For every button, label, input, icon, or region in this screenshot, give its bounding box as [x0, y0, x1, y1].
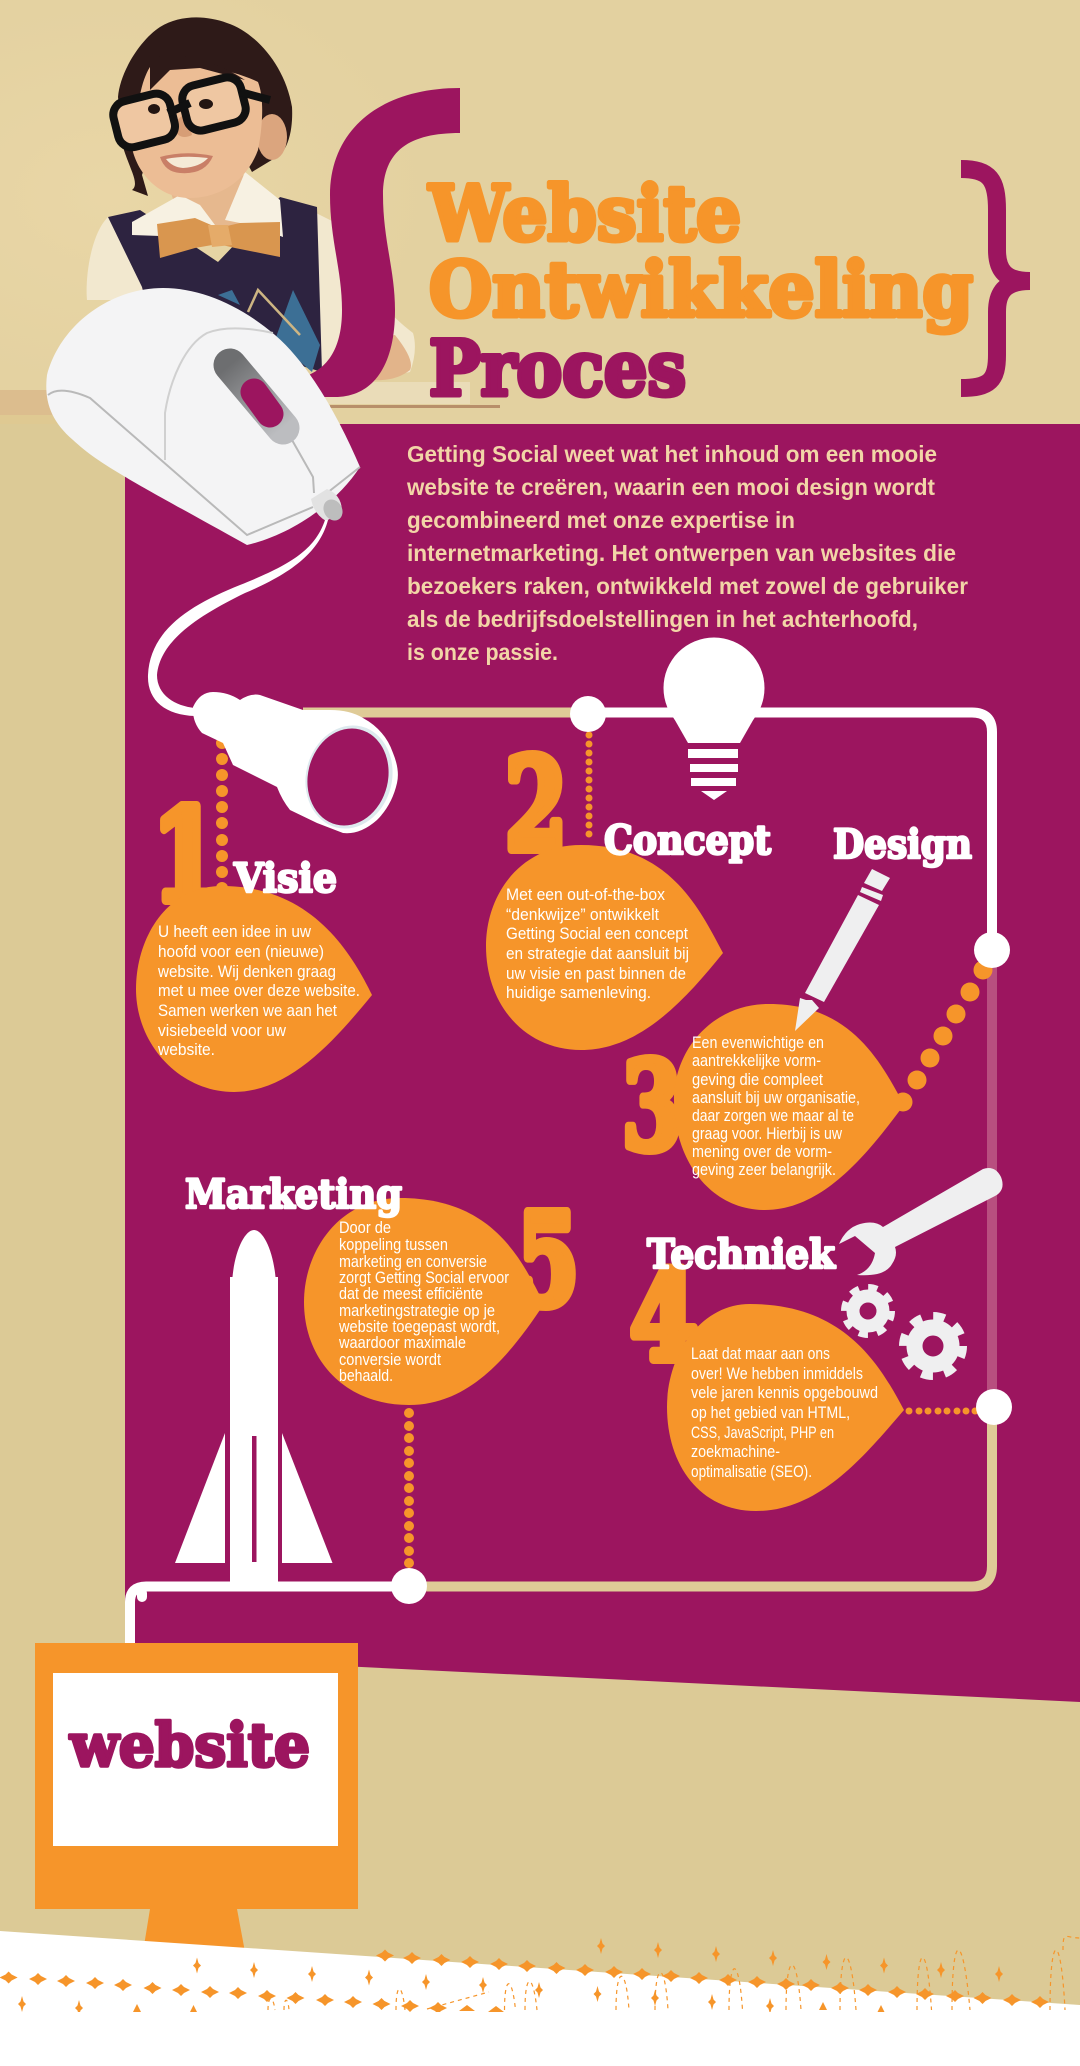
bubble 5: marketing: conversie wordt	[339, 1351, 441, 1369]
icon: wrench	[839, 1168, 1003, 1275]
bubble 1: visie	[136, 886, 372, 1092]
title: Ontwikkeling	[429, 245, 973, 334]
heading: concept: Concept	[604, 817, 771, 864]
intro text: gecombineerd met onze expertise in	[407, 507, 795, 533]
bubble 3: design: aantrekkelijke vorm-	[692, 1052, 821, 1070]
icon: light bulb	[664, 638, 764, 800]
bubble 5: marketing: website toegepast wordt,	[338, 1318, 500, 1336]
pipeline nodes	[391, 696, 1012, 1604]
bubble 1: visie: met u mee over deze website.	[158, 982, 360, 1000]
heading: techniek: Techniek	[647, 1231, 836, 1278]
heading: visie: Visie	[233, 855, 337, 902]
photo: child with glasses and bow tie	[87, 17, 415, 380]
bubble 1: visie: hoofd voor een (nieuwe)	[158, 943, 324, 961]
monitor	[35, 1643, 358, 1952]
bubble 1: visie: website. Wij denken graag	[157, 963, 336, 981]
numeral 3: 3	[622, 1034, 682, 1178]
bubble 5: marketing: koppeling tussen	[339, 1236, 448, 1254]
footer diamonds pattern	[0, 1936, 1080, 2016]
bubble 2: concept: “denkwijze” ontwikkelt	[506, 906, 659, 924]
book on table	[320, 382, 500, 408]
icon: small gear	[844, 1287, 892, 1335]
bubble 4: techniek: vele jaren kennis opgebouwd	[691, 1384, 878, 1402]
icon: mouse	[46, 288, 360, 545]
bubble 2: concept	[486, 845, 723, 1050]
title: Proces	[429, 324, 686, 413]
bubble 1: visie: U heeft een idee in uw	[158, 923, 311, 941]
bubble 3: design	[674, 1004, 904, 1210]
intro text: internetmarketing. Het ontwerpen van websites die	[407, 540, 956, 566]
numeral 1: 1	[152, 782, 220, 930]
icon: mouse cable	[148, 520, 328, 716]
bubble 4: techniek	[667, 1304, 904, 1511]
bubble 4: techniek: over! We hebben inmiddels	[691, 1365, 863, 1383]
intro text: website te creëren, waarin een mooi design wordt	[406, 474, 935, 500]
numeral 5: 5	[517, 1186, 579, 1334]
intro text: is onze passie.	[407, 639, 558, 665]
bubble 2: concept: uw visie en past binnen de	[506, 965, 686, 983]
bubble 5: marketing: Door de	[339, 1219, 391, 1237]
icon: cable plug	[193, 692, 403, 838]
bubble 4: techniek: op het gebied van HTML,	[691, 1404, 850, 1422]
bubble 2: concept: Met een out-of-the-box	[506, 886, 666, 904]
right brace	[961, 169, 1030, 388]
bubble 3: design: Een evenwichtige en	[692, 1034, 824, 1052]
bubble 5: marketing: zorgt Getting Social ervoor	[339, 1269, 509, 1287]
bubble 3: design: graag voor. Hierbij is uw	[692, 1125, 842, 1143]
bubble 2: concept: Getting Social een concept	[506, 925, 688, 943]
monitor: website	[69, 1711, 310, 1781]
bubble 3: design: geving zeer belangrijk.	[692, 1161, 836, 1179]
bubble 5: marketing: waardoor maximale	[338, 1334, 466, 1352]
intro text	[406, 441, 968, 665]
bubble 1: visie: website.	[157, 1041, 215, 1059]
title	[428, 169, 973, 413]
bubble 3: design: geving die compleet	[692, 1071, 823, 1089]
bubble 4: techniek: Laat dat maar aan ons	[691, 1345, 830, 1363]
intro text: als de bedrijfsdoelstellingen in het achterhoofd,	[407, 606, 918, 632]
heading: design: Design	[833, 821, 972, 868]
bubble 4: techniek: CSS, JavaScript, PHP en	[691, 1424, 834, 1442]
bubble 2: concept: huidige samenleving.	[506, 984, 651, 1002]
bubble 5: marketing	[304, 1198, 544, 1405]
bubble 5: marketing: behaald.	[339, 1367, 393, 1385]
bubble 5: marketing: marketingstrategie op je	[339, 1302, 495, 1320]
bubble 1: visie: Samen werken we aan het	[158, 1002, 337, 1020]
bubble 3: design: mening over de vorm-	[692, 1143, 832, 1161]
heading: marketing: Marketing	[185, 1171, 402, 1218]
bubble 4: techniek: zoekmachine-	[691, 1443, 780, 1461]
bubble 5: marketing: dat de meest efficiënte	[339, 1285, 483, 1303]
bubble 4: techniek: optimalisatie (SEO).	[691, 1463, 812, 1481]
process pipeline	[130, 712, 992, 1645]
dotted connectors	[216, 732, 992, 1568]
icon: pencil	[795, 869, 890, 1031]
left bracket	[300, 88, 460, 397]
white footer band	[0, 1931, 1080, 2066]
bubble 2: concept: en strategie dat aansluit bij	[506, 945, 689, 963]
bubble 5: marketing: marketing en conversie	[339, 1253, 487, 1271]
bubble 1: visie: visiebeeld voor uw	[158, 1022, 286, 1040]
intro text: Getting Social weet wat het inhoud om een mooie	[407, 441, 937, 467]
icon: large gear	[903, 1316, 963, 1376]
bubble 3: design: aansluit bij uw organisatie,	[692, 1089, 860, 1107]
bubble 3: design: daar zorgen we maar al te	[692, 1107, 854, 1125]
numeral 4: 4	[630, 1244, 698, 1388]
numeral 2: 2	[505, 731, 567, 879]
icon: rocket	[175, 1230, 332, 1582]
title: Website	[428, 169, 741, 258]
intro text: bezoekers raken, ontwikkeld met zowel de gebruiker	[407, 573, 968, 599]
purple panel	[125, 424, 1080, 1702]
